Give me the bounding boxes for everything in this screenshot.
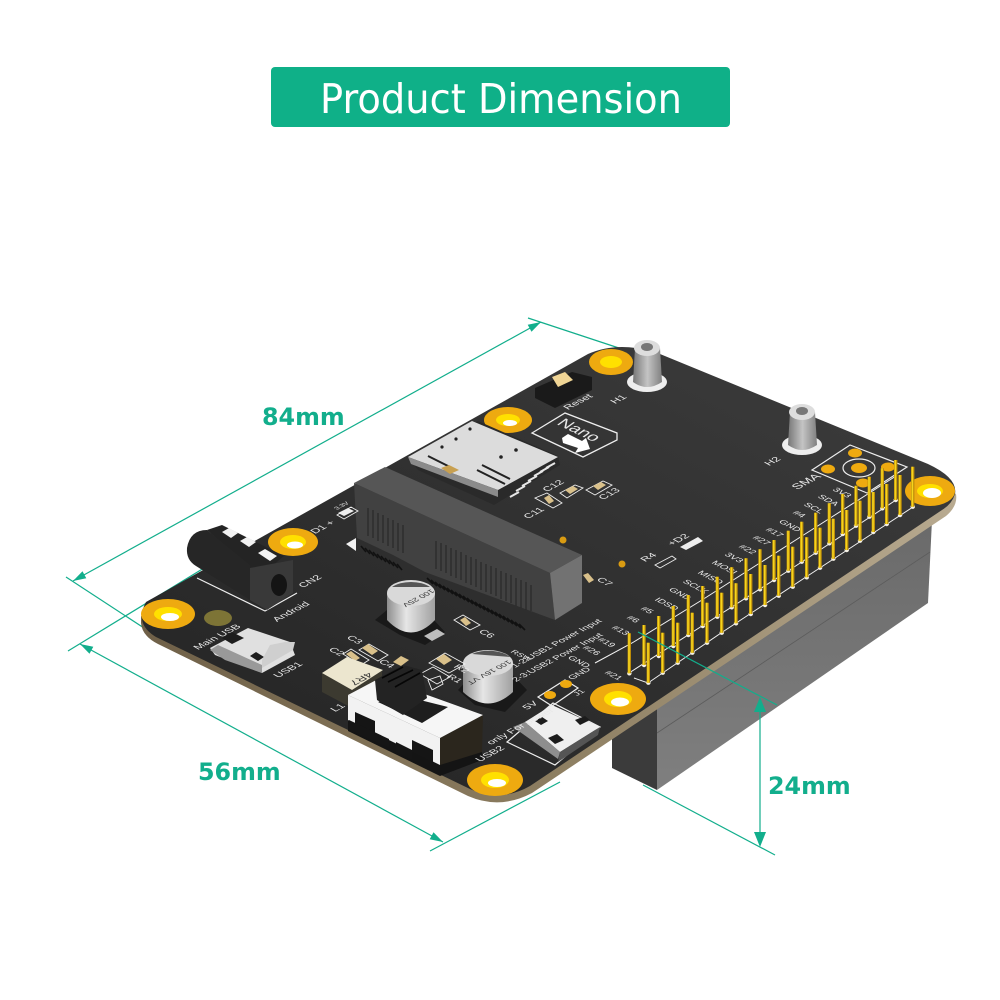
mini PCIe connector xyxy=(346,467,582,630)
board silkscreen labels: C6 xyxy=(476,628,497,640)
dimension: 84mm length xyxy=(66,318,634,628)
title xyxy=(271,67,730,127)
circuit board xyxy=(141,347,956,802)
board silkscreen labels: RSW xyxy=(508,649,534,663)
pin header silkscreen rows xyxy=(595,476,913,683)
board silkscreen labels: Reset xyxy=(562,393,596,411)
board silkscreen labels: #5 xyxy=(638,605,656,615)
board silkscreen labels: SCLK xyxy=(680,578,711,595)
board silkscreen labels: C2 xyxy=(326,646,347,658)
reset switch xyxy=(535,372,592,408)
board silkscreen labels: only For power xyxy=(485,707,558,746)
board silkscreen labels: #27 xyxy=(750,534,773,546)
board silkscreen labels: #6 xyxy=(624,614,642,624)
nano SIM marking xyxy=(532,413,617,457)
audio jack CN2 xyxy=(187,525,297,611)
capacitor 2: 100 16V VT xyxy=(465,659,513,686)
capacitor 1: 100 25V xyxy=(399,588,436,608)
board silkscreen labels xyxy=(192,393,854,763)
SIM card holder xyxy=(408,421,560,505)
capacitor 2 xyxy=(458,650,527,712)
board silkscreen labels: C11 xyxy=(522,506,548,520)
board edge xyxy=(141,490,956,802)
board silkscreen labels: C12 xyxy=(541,479,567,493)
board silkscreen labels: 3V3 xyxy=(830,486,854,499)
board silkscreen labels: L1 xyxy=(329,702,348,713)
header pins xyxy=(629,460,913,683)
board silkscreen labels: C13 xyxy=(597,487,623,501)
micro USB 1 xyxy=(210,628,295,673)
board silkscreen labels: D1 + xyxy=(309,519,338,535)
board silkscreen labels: +D2 xyxy=(666,533,693,547)
board silkscreen labels: GND xyxy=(565,654,593,669)
board silkscreen labels: GND xyxy=(566,666,593,681)
inductor 4R7: 4R7 xyxy=(346,671,375,686)
board silkscreen labels: R4 xyxy=(639,552,660,563)
pin header block xyxy=(612,520,932,790)
board silkscreen labels: MISO xyxy=(695,569,726,585)
board silkscreen labels: #4 xyxy=(790,509,808,519)
board silkscreen labels: 5V xyxy=(521,700,541,711)
board silkscreen labels: SMA xyxy=(788,471,825,491)
board silkscreen labels: 1-2:USB1 Power Input xyxy=(509,617,604,669)
board silkscreen labels: #21 xyxy=(602,669,625,681)
board silkscreen labels: SDA xyxy=(815,493,842,508)
board silkscreen labels: 3V3 xyxy=(722,551,746,564)
board silkscreen labels: GND xyxy=(666,586,694,601)
mounting holes xyxy=(141,349,955,796)
micro USB 2 xyxy=(507,703,600,765)
slide switch xyxy=(348,665,483,776)
board silkscreen labels: C4 xyxy=(376,658,397,670)
standoff H1 xyxy=(627,340,667,392)
board silkscreen labels: R2 xyxy=(451,663,472,675)
dimension: 24mm height: 24mm xyxy=(768,772,851,800)
board silkscreen labels: #22 xyxy=(736,543,759,555)
board silkscreen labels: CN2 xyxy=(297,574,325,589)
standoff H2 xyxy=(782,404,822,455)
board silkscreen labels: C3 xyxy=(344,634,365,646)
title: Product Dimension xyxy=(320,75,682,123)
board silkscreen labels: H2 xyxy=(763,456,784,467)
board silkscreen labels: H1 xyxy=(609,394,630,405)
dimension: 56mm width: 56mm xyxy=(198,758,281,786)
board silkscreen labels: SCL xyxy=(801,501,826,515)
board silkscreen labels: R1 xyxy=(444,673,465,685)
board silkscreen labels: #19 xyxy=(595,636,618,648)
board surface xyxy=(142,347,955,795)
board silkscreen labels: #13 xyxy=(609,624,632,636)
board silkscreen labels: #17 xyxy=(763,526,786,538)
SMA pads xyxy=(812,445,907,493)
board silkscreen labels: J1 xyxy=(571,688,587,697)
board silkscreen labels: C7 xyxy=(594,576,615,588)
board silkscreen labels: GND xyxy=(776,518,804,533)
J1 pads xyxy=(538,680,578,706)
board silkscreen labels: #26 xyxy=(580,644,603,656)
dimension: 84mm length: 84mm xyxy=(262,403,345,431)
board silkscreen labels: MOSI xyxy=(709,559,740,575)
capacitor 1 xyxy=(375,580,445,645)
board silkscreen labels: Android xyxy=(271,600,313,623)
nano SIM marking: Nano xyxy=(553,416,605,444)
board silkscreen labels: Main USB xyxy=(192,623,244,651)
board silkscreen labels: 3.3V xyxy=(333,501,352,511)
board silkscreen labels: USB2 xyxy=(474,745,508,763)
board silkscreen labels: 2-3:USB2 Power Input xyxy=(510,631,605,683)
board silkscreen labels: USB1 xyxy=(272,661,306,679)
inductor 4R7 xyxy=(322,657,383,708)
board silkscreen labels: IDSD xyxy=(652,596,682,612)
small SMD parts xyxy=(337,481,703,690)
dimension: 24mm height xyxy=(638,632,851,855)
dimension: 56mm width xyxy=(68,568,560,851)
